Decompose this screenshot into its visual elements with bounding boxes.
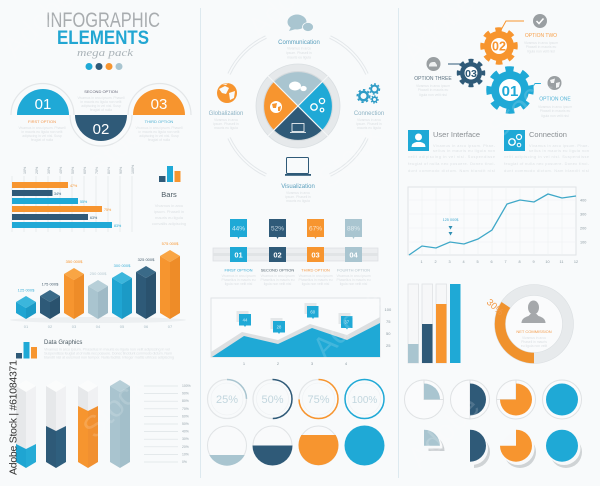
area chart — [211, 298, 392, 366]
option one: ligula non velit nisl — [541, 114, 569, 118]
horizontal bar chart: 80% — [107, 166, 111, 174]
option 3 — [298, 219, 333, 286]
option 2: Phasellus in mauris eu — [260, 278, 295, 282]
percent scale: 20% — [182, 445, 189, 449]
option 1: FIRST OPTION — [225, 268, 253, 272]
progress rings: 25% — [216, 394, 238, 406]
horizontal bar chart: 75% — [104, 208, 112, 212]
communication item: mauris eu ligula — [287, 56, 311, 60]
gear 03: 03 — [465, 68, 477, 80]
data graphics text: Data Graphics — [44, 340, 82, 346]
horizontal bar chart: 100% — [131, 164, 135, 174]
horizontal bar chart: 30% — [47, 166, 51, 174]
horizontal bar chart: 83% — [114, 224, 122, 228]
isometric bar chart: 325 000$ — [138, 257, 155, 262]
icon: bars — [159, 166, 180, 182]
horizontal bar chart: 47% — [70, 184, 78, 188]
data graphics text: Vivamus in arcu ipsum. Phasellus in mauris eu ligula non velit adipiscing in vel — [44, 348, 170, 352]
panel: user interface — [408, 130, 496, 173]
percent scale: 40% — [182, 430, 189, 434]
isometric bar chart: 175 000$ — [42, 282, 59, 286]
area chart: 25 — [386, 343, 391, 348]
visualization item: Visualization — [281, 184, 315, 190]
isometric bar chart: 01 — [24, 324, 29, 329]
line chart: 7 — [504, 260, 507, 264]
horizontal bar chart: 34% — [54, 192, 62, 196]
fill level circles — [208, 426, 384, 466]
isometric bar chart — [10, 241, 186, 329]
line chart: 200 — [580, 226, 586, 230]
three option semicircles: THIRD OPTION — [145, 119, 173, 124]
line chart: 125 000$ — [443, 218, 459, 222]
icon: globe — [217, 83, 237, 103]
percent scale: 0% — [182, 460, 187, 464]
icon: globe grey — [548, 76, 562, 90]
option three: ligula non velit nisl — [419, 93, 447, 97]
globalization item: ipsum. Phasell in — [213, 122, 239, 126]
three option semicircles: Vivamus in arcu ipsum. Phasell — [135, 126, 183, 130]
option one — [532, 76, 572, 118]
icon: laptop in pie — [290, 124, 306, 132]
horizontal bar chart: 70% — [95, 166, 99, 174]
three option semicircles: feugiat of nulla — [31, 138, 53, 142]
data tags: 28 — [277, 324, 282, 330]
option 3: THIRD OPTION — [301, 268, 330, 272]
line chart: 2 — [434, 260, 437, 264]
option three — [414, 57, 464, 97]
line chart: 8 — [518, 260, 521, 264]
isometric bar chart: 350 000$ — [66, 259, 83, 264]
option 4: Vivamus in arcu ipsum — [336, 274, 371, 278]
isometric bar chart: 575 000$ — [162, 241, 179, 246]
bars text block: ipsum. Phasell in — [154, 209, 184, 214]
line chart: 10 — [545, 260, 550, 264]
icon: gears square — [504, 130, 525, 151]
option 2: SECOND OPTION — [261, 268, 294, 272]
option 4: Phasellus in mauris eu — [336, 278, 371, 282]
option 3: ligula non velit nisl — [302, 282, 329, 286]
isometric bar chart: 250 000$ — [90, 271, 107, 276]
circular arcs — [229, 37, 367, 175]
icon: person — [522, 300, 546, 323]
percent scale: 70% — [182, 407, 189, 411]
option two: Phasell in mauris eu — [526, 45, 556, 49]
panel: user interface: velit adipiscing in vel nisl. Suspendisse — [408, 155, 495, 159]
area chart: 4 — [345, 361, 348, 366]
horizontal bar chart: 60% — [83, 166, 87, 174]
icon: car — [426, 57, 440, 71]
percent scale: 60% — [182, 414, 189, 418]
panel: connection — [504, 130, 590, 173]
option 4 — [336, 219, 371, 286]
option 2: 02 — [273, 250, 282, 260]
horizontal bar chart: 55% — [80, 200, 88, 204]
line chart: 9 — [532, 260, 535, 264]
icon: laptop — [285, 158, 311, 176]
globalization item: Globalization — [209, 111, 243, 117]
watermark: Stock — [82, 108, 159, 185]
horizontal bar chart: 10% — [23, 166, 27, 174]
pie charts with shadows — [424, 430, 582, 468]
bars text block: Vivamus in arcu — [155, 203, 183, 208]
line chart: 4 — [462, 260, 465, 264]
option three: Phasell in mauris eu — [418, 88, 448, 92]
bars text block: convallis adipiscing — [152, 221, 186, 226]
option one: Phasell in mauris eu — [540, 109, 570, 113]
isometric bar chart: 300 000$ — [114, 263, 131, 268]
three option semicircles: Vivamus in arcu ipsum. Phasell — [18, 126, 66, 130]
option three: Vivamus in arcu ipsum — [416, 84, 450, 88]
panel: connection: Connection — [529, 130, 567, 139]
area chart: 2 — [277, 361, 280, 366]
data graphics text: Suspendisse feugiat ut of nulla nec posuere. Donec tincidunt commodo dictum. Nam — [44, 352, 172, 356]
connection item: Connection — [354, 111, 384, 117]
icon: data graphics bars — [16, 342, 37, 358]
three option semicircles: adipiscing in vel nisl. Susp — [22, 134, 62, 138]
line chart: 400 — [580, 198, 586, 202]
horizontal bar chart: 50% — [71, 166, 75, 174]
watermark: Stock — [312, 118, 389, 195]
panel: user interface: sellus in mauris eu ligula non — [433, 149, 495, 153]
four option percent selector — [213, 219, 378, 286]
option 1: Vivamus in arcu ipsum — [221, 274, 256, 278]
watermark: Adobe — [402, 390, 486, 475]
option 3: 67% — [309, 226, 322, 232]
watermark: Adobe — [307, 280, 391, 365]
panel: connection: velit adipiscing in vel nisl. Suspendisse — [504, 155, 589, 159]
option 1: Phasellus in mauris eu — [221, 278, 256, 282]
central pie wheel — [256, 64, 340, 148]
line chart: 3 — [448, 260, 451, 264]
option 2: ligula non velit nisl — [264, 282, 291, 286]
panel: user interface: feugiat of nulla nec posuere. Donec tinci- — [408, 162, 496, 166]
isometric bar chart: 02 — [48, 324, 53, 329]
visualization item: ipsum. Phasell in — [285, 195, 311, 199]
area chart: 75 — [386, 319, 391, 324]
line chart: 12 — [574, 260, 578, 264]
line chart: 300 — [580, 212, 586, 216]
title: mega pack — [77, 47, 134, 59]
option 1: 44% — [232, 226, 245, 232]
visualization item — [281, 158, 315, 203]
option 2: Vivamus in arcu ipsum — [260, 274, 295, 278]
horizontal bar chart — [12, 164, 135, 232]
data graphics text: blandit nisl at euismod non tempor. Nulla facilisi. Integer mattis ultrices adipiscing — [44, 356, 174, 360]
net commission donut: 30% — [484, 297, 506, 318]
three option semicircles: 01 — [35, 96, 51, 113]
three option semicircles: 03 — [151, 96, 167, 113]
icon: speech bubbles — [288, 14, 314, 32]
connection item — [354, 84, 384, 130]
option 1 — [221, 219, 256, 286]
line chart: 5 — [476, 260, 479, 264]
option 3: Phasellus in mauris eu — [298, 278, 333, 282]
horizontal bar chart: 20% — [35, 166, 39, 174]
gear 02 — [482, 30, 516, 62]
net commission donut: NET COMMISSION — [516, 329, 552, 334]
data tags: 44 — [243, 318, 248, 322]
option 4: FOURTH OPTION — [337, 268, 370, 272]
three option semicircles: feugiat of nulla — [148, 138, 170, 142]
communication item — [278, 14, 320, 60]
three option semicircles: Vivamus in arcu ipsum. Phasell — [77, 96, 125, 100]
area chart: 100 — [384, 307, 392, 312]
three option semicircles: 02 — [93, 121, 109, 138]
gear 01: 01 — [502, 83, 518, 100]
option one: Vivamus in arcu ipsum — [538, 105, 572, 109]
line chart — [408, 187, 586, 264]
icon: user — [408, 130, 429, 151]
isometric bar chart: 06 — [144, 324, 149, 329]
option 1: ligula non velit nisl — [225, 282, 252, 286]
isometric bar chart: 04 — [96, 324, 101, 329]
net commission donut: Phasell in mauris — [521, 340, 547, 344]
icon: gears in pie — [311, 98, 325, 112]
panel: user interface: User Interface — [433, 130, 480, 139]
progress rings — [208, 380, 384, 418]
three option semicircles: in mauris eu ligula non velit — [22, 130, 63, 134]
option 4: 04 — [349, 250, 358, 260]
gear 03 — [458, 60, 484, 86]
area chart: 1 — [243, 361, 246, 366]
connection item: Vivamus in arcu — [357, 118, 381, 122]
globalization item: mauris eu ligula — [214, 126, 238, 130]
option 2 — [260, 219, 295, 286]
three option semicircles: in mauris eu ligula non velit — [139, 130, 180, 134]
icon: chat in pie — [289, 82, 307, 91]
percent scale: 100% — [182, 384, 191, 388]
percent scale — [144, 384, 191, 464]
horizontal bar chart: 63% — [90, 216, 98, 220]
option 2: 52% — [271, 226, 284, 232]
area chart: 50 — [386, 331, 391, 336]
isometric fill columns — [16, 380, 130, 468]
gear 02: 02 — [492, 40, 506, 54]
title — [46, 9, 160, 59]
option three: OPTION THREE — [414, 76, 452, 82]
communication item: Communication — [278, 40, 320, 46]
stock id label: Adobe Stock | #61084371 — [8, 360, 20, 475]
line chart: 6 — [490, 260, 493, 264]
isometric bar chart: 07 — [168, 324, 173, 329]
connection item: ipsum. Phasell in — [356, 122, 382, 126]
bars text block: Bars — [161, 190, 177, 199]
option 3: 03 — [311, 250, 320, 260]
option 3: Vivamus in arcu ipsum — [298, 274, 333, 278]
communication item: Vivamus in arcu — [287, 46, 311, 50]
panel: connection: feugiat of nulla nec posuere. Donec tinci- — [504, 162, 590, 166]
panel: user interface: Vivamus in arcu ipsum. Phae- — [433, 144, 496, 148]
three option semicircles: SECOND OPTION — [84, 89, 118, 94]
line chart: 100 — [580, 240, 586, 244]
vertical level bars — [408, 284, 460, 363]
isometric bar chart: 125 000$ — [18, 288, 35, 292]
line chart: 11 — [560, 260, 563, 264]
percent scale: 50% — [182, 422, 189, 426]
option two: OPTION TWO — [525, 33, 557, 39]
panel: connection: dunt commodo dictum. Nam blandit nisl — [504, 169, 589, 173]
globalization item: Vivamus in arcu — [214, 118, 238, 122]
three option semicircles: adipiscing in vel nisl. Susp — [81, 104, 121, 108]
data tags: 37 — [344, 320, 350, 324]
watermark: Stock — [482, 68, 559, 145]
three option semicircles: FIRST OPTION — [28, 119, 56, 124]
bars text block — [152, 190, 186, 226]
net commission donut — [484, 284, 574, 364]
data tags — [236, 303, 352, 334]
panel: connection: sellus in mauris eu ligula non — [529, 149, 589, 153]
connection item: mauris eu ligula — [357, 126, 381, 130]
visualization item: Vivamus in arcu — [286, 191, 310, 195]
net commission donut: eu ligula non velit — [521, 344, 547, 348]
isometric bar chart: 05 — [120, 324, 125, 329]
icon: globe in pie — [270, 101, 282, 113]
globalization item — [209, 83, 243, 130]
gear 01 — [489, 69, 531, 111]
three option semicircles — [11, 84, 191, 146]
horizontal bar chart: 40% — [59, 166, 63, 174]
option 4: 88% — [347, 226, 360, 232]
option one: OPTION ONE — [539, 96, 571, 102]
option two: ligula non velit nisl — [527, 50, 555, 54]
horizontal bar chart: 90% — [119, 166, 123, 174]
area chart: 3 — [311, 361, 314, 366]
pie charts with rings — [404, 380, 582, 419]
progress rings: 100% — [352, 395, 377, 406]
percent scale: 90% — [182, 392, 189, 396]
icon: gears — [357, 84, 380, 103]
data graphics text — [44, 340, 174, 360]
colour dots — [86, 63, 122, 70]
isometric bar chart: 03 — [72, 324, 77, 329]
watermark: Stock — [77, 368, 154, 445]
percent scale: 10% — [182, 452, 189, 456]
option 4: ligula non velit nisl — [340, 282, 367, 286]
net commission donut: Vivamus in arcu — [522, 336, 546, 340]
option 1: 01 — [234, 250, 243, 260]
title: INFOGRAPHIC — [46, 9, 160, 32]
visualization item: mauris eu ligula — [286, 199, 310, 203]
three option semicircles: adipiscing in vel nisl. Susp — [139, 134, 179, 138]
data tags: 60 — [310, 310, 316, 314]
line chart: 1 — [420, 260, 423, 264]
option two: Vivamus in arcu ipsum — [524, 41, 558, 45]
panel: connection: Vivamus in arcu ipsum. Phae- — [529, 144, 590, 148]
progress rings: 75% — [307, 394, 330, 406]
option two — [501, 14, 558, 54]
panel: user interface: dunt commodo dictum. Nam blandit nisl — [408, 169, 495, 173]
bars text block: mauris eu ligula — [155, 215, 184, 220]
communication item: ipsum. Phasell in — [286, 51, 312, 55]
icon: check — [533, 14, 547, 28]
three option semicircles: feugiat of nulla — [90, 108, 112, 112]
percent scale: 80% — [182, 399, 189, 403]
percent scale: 30% — [182, 437, 189, 441]
title: ELEMENTS — [57, 28, 149, 49]
three option semicircles: in mauris eu ligula non velit — [81, 100, 122, 104]
progress rings: 50% — [261, 394, 284, 406]
